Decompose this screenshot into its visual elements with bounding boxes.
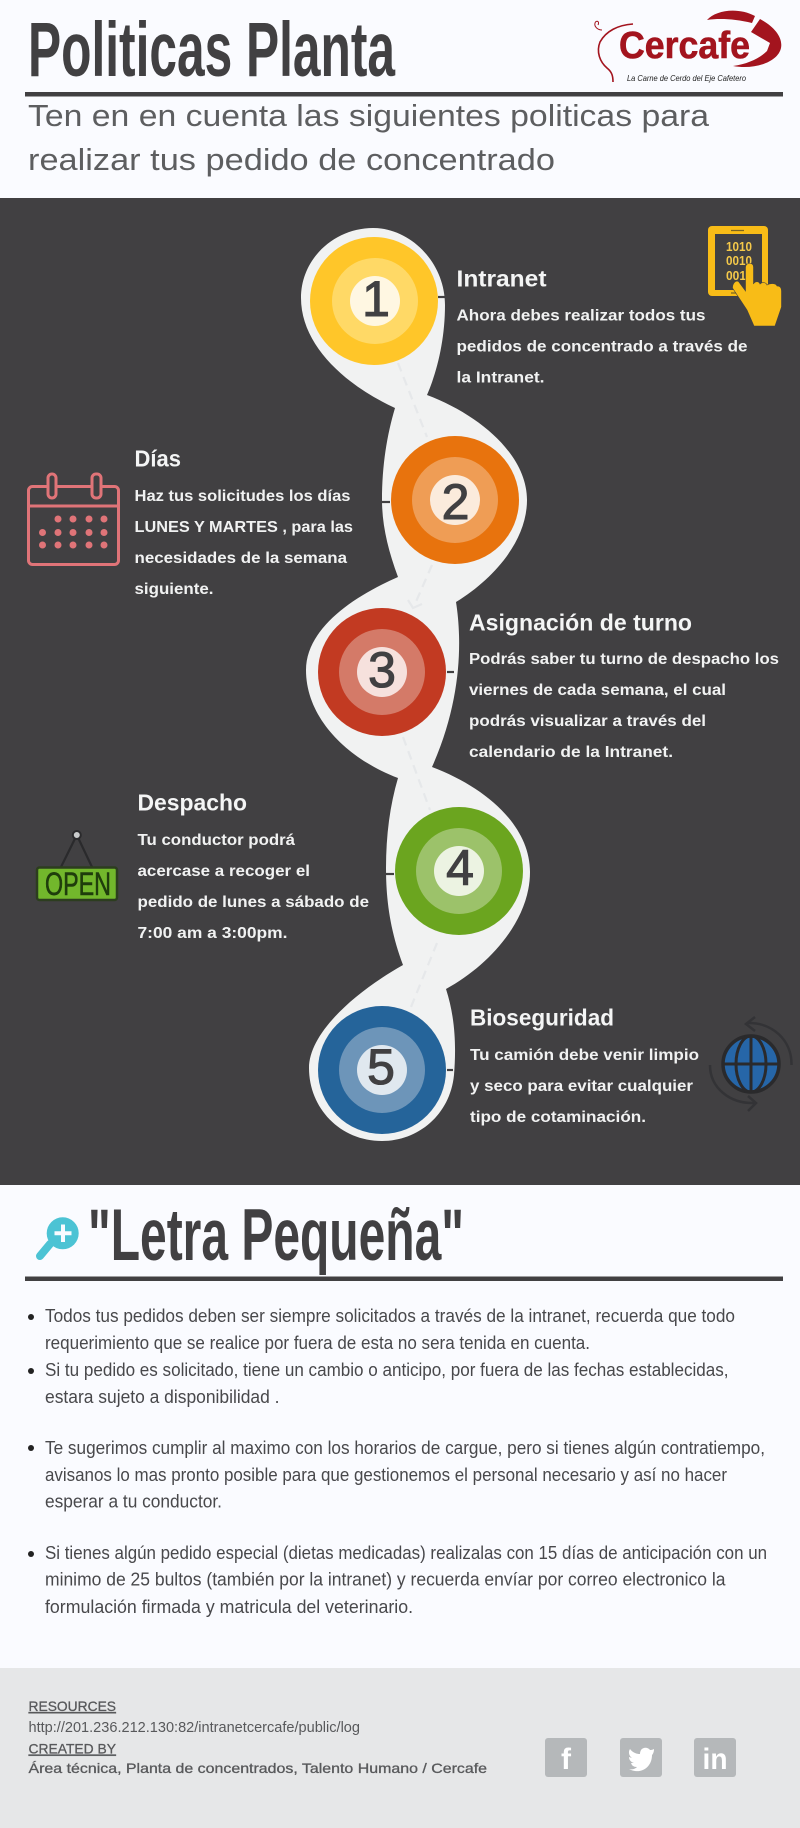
footer panel [0, 1668, 800, 1828]
step 2 text: Haz tus solicitudes los días [134, 488, 351, 505]
icon: open sign [37, 831, 117, 902]
footer credits: RESOURCES [28, 1698, 116, 1714]
section rule [25, 1276, 783, 1281]
step 4 text: pedido de lunes a sábado de [138, 894, 369, 911]
title: Politicas Planta [28, 7, 396, 93]
step 2 text: necesidades de la semana [134, 550, 347, 567]
step 1 text: Intranet [456, 266, 547, 292]
step 5 text: y seco para evitar cualquier [470, 1078, 693, 1095]
step 2 circle: 2 [442, 474, 469, 530]
step 4 text: acercase a recoger el [138, 863, 310, 880]
logo: Cercafe: La Carne de Cerdo del Eje Cafetero [627, 73, 746, 83]
bullet list: Todos tus pedidos deben ser siempre solicitados a través de la intranet, recuerda que todo [45, 1305, 735, 1326]
dashed connectors [398, 363, 437, 1007]
icon: globe with arrows [710, 1017, 792, 1111]
icon: tablet with hand: 001 [726, 268, 746, 283]
icon: calendar [28, 474, 118, 564]
subtitle [28, 99, 709, 177]
step 4 text: Despacho [138, 790, 247, 816]
logo: Cercafe [595, 11, 781, 83]
step 4 text: 7:00 am a 3:00pm. [138, 925, 288, 942]
step 3 text: viernes de cada semana, el cual [469, 682, 726, 699]
bullet list: esperar a tu conductor. [45, 1490, 222, 1512]
step 2 text: LUNES Y MARTES , para las [134, 519, 353, 536]
icon: magnifier [40, 1217, 79, 1256]
icon: linkedin: in [702, 1743, 728, 1776]
step 5 text: tipo de cotaminación. [470, 1109, 646, 1126]
step 2 circle [391, 436, 519, 564]
heading: Letra Pequeña: "Letra Pequeña" [88, 1195, 464, 1276]
step 5 circle [318, 1006, 446, 1134]
step 4 circle [395, 807, 523, 935]
subtitle: realizar tus pedido de concentrado [28, 143, 555, 177]
footer credits [28, 1698, 487, 1776]
bullet list: formulación firmada y matricula del veterinario. [45, 1596, 413, 1617]
step 5 text [470, 1004, 699, 1126]
icon: tablet with hand [708, 226, 782, 326]
icon: facebook: f [561, 1743, 572, 1776]
bullet list: requerimiento que se realice por fuera de esta no sera tenida en cuenta. [45, 1332, 590, 1353]
step 3 text: calendario de la Intranet. [469, 744, 673, 761]
icon: facebook [545, 1738, 587, 1777]
header rule [25, 92, 783, 96]
step 2 text: siguiente. [134, 581, 214, 598]
step 1 text: Ahora debes realizar todos tus [456, 308, 706, 324]
step 4 text: Tu conductor podrá [138, 832, 295, 849]
step 2 text: Días [134, 446, 181, 472]
connector ticks [382, 297, 454, 1070]
footer credits: Área técnica, Planta de concentrados, Talento Humano / Cercafe [28, 1760, 487, 1776]
step 5 text: Tu camión debe venir limpio [470, 1047, 699, 1064]
icon: twitter [620, 1738, 662, 1777]
icon: tablet with hand: 0010 [726, 253, 752, 268]
step 1 text [456, 266, 748, 386]
step 5 text: Bioseguridad [470, 1004, 614, 1030]
footer credits: CREATED BY [28, 1740, 117, 1756]
step 3 text: Podrás saber tu turno de despacho los [469, 651, 779, 668]
bullet list: Te sugerimos cumplir al maximo con los horarios de cargue, pero si tienes algún contratiempo, [45, 1437, 765, 1458]
bullet list [28, 1305, 767, 1617]
step 4 text [138, 790, 369, 942]
step 3 text: Asignación de turno [469, 610, 692, 636]
bullet list: avisanos lo mas pronto posible para que gestionemos el personal necesario y así no hacer [45, 1464, 727, 1485]
step 4 circle: 4 [446, 840, 474, 896]
step 1 text: la Intranet. [456, 370, 544, 386]
icon: linkedin [694, 1738, 736, 1777]
bullet list: Si tu pedido es solicitado, tiene un cambio o anticipo, por fuera de las fechas establecidas, [45, 1359, 728, 1380]
step 3 text: podrás visualizar a través del [469, 713, 706, 730]
step 1 circle: 1 [362, 271, 390, 327]
subtitle: Ten en en cuenta las siguientes politicas para [28, 99, 709, 133]
step 3 circle: 3 [368, 642, 396, 698]
step 1 circle [310, 237, 438, 365]
bullet list: estara sujeto a disponibilidad . [45, 1386, 280, 1407]
step 5 circle: 5 [367, 1039, 395, 1095]
icon: open sign: OPEN [45, 866, 111, 902]
icon: tablet with hand: 1010 [726, 239, 752, 254]
step 3 text [469, 610, 779, 761]
logo: Cercafe: Cercafe [619, 25, 750, 67]
step 1 text: pedidos de concentrado a través de [456, 338, 748, 356]
panel: steps [0, 198, 800, 1185]
step 2 text [134, 446, 353, 598]
winding light band [301, 228, 530, 1141]
bullet list: minimo de 25 bultos (también por la intranet) y recuerda envíar por correo electronico la [45, 1568, 726, 1590]
step 3 circle [318, 608, 446, 736]
footer credits: http://201.236.212.130:82/intranetcercafe/public/log [28, 1720, 360, 1736]
